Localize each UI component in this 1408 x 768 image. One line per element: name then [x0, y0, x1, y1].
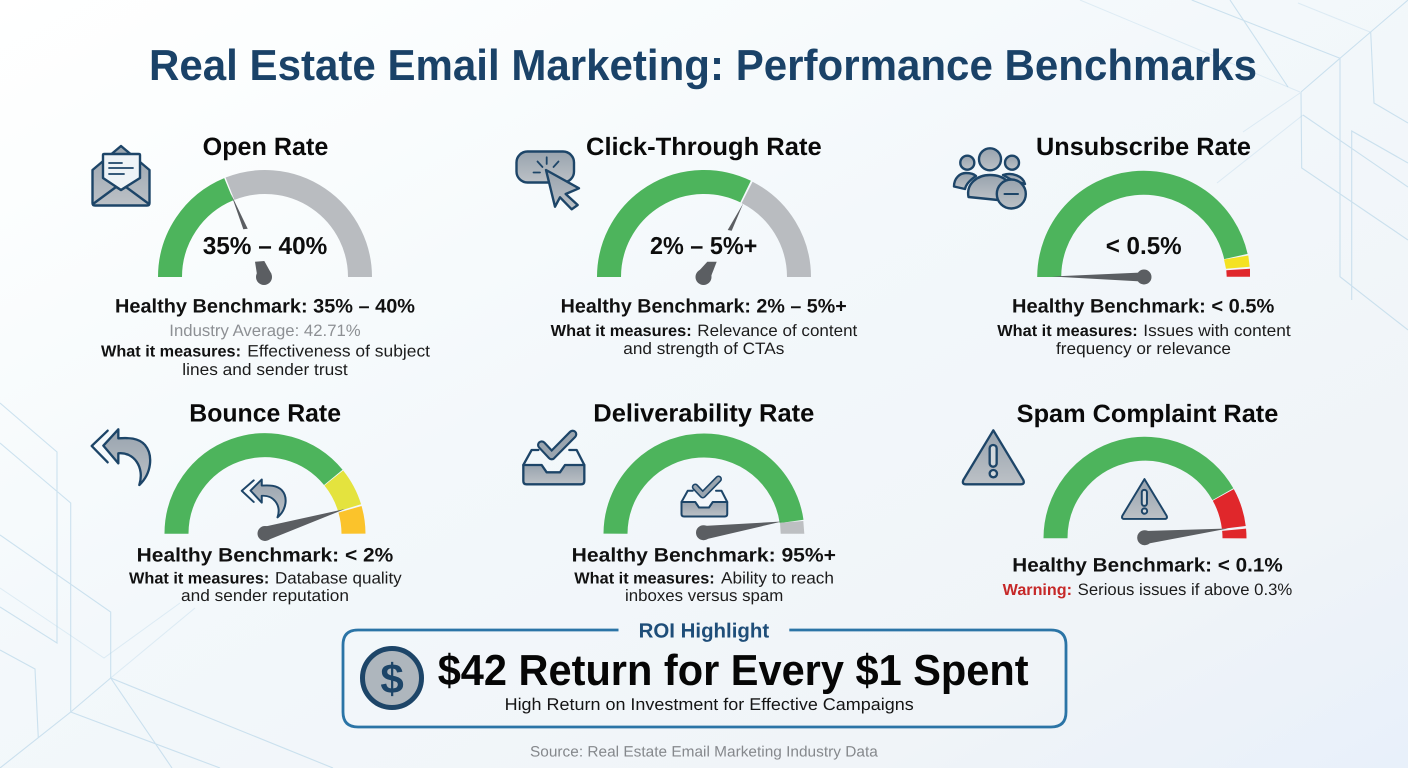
benchmark: deliverability rate: Healthy Benchmark: 95%+: [572, 545, 836, 567]
ROI subtext: High Return on Investment for Effective Campaigns: [505, 695, 914, 714]
description: bounce rate: Database quality: [275, 569, 402, 587]
gauge: deliverability rate: [616, 445, 804, 540]
icon: dollar coin: [362, 648, 422, 708]
heading: bounce rate: Bounce Rate: [189, 400, 341, 428]
panel: deliverability rate: [523, 400, 836, 605]
description: unsubscribe rate: What it measures:: [997, 323, 1138, 340]
icon: dollar coin: $: [380, 655, 404, 702]
description: unsubscribe rate: frequency or relevance: [1056, 340, 1231, 358]
description: click-through rate: What it measures:: [551, 323, 692, 340]
warning note: Serious issues if above 0.3%: [1078, 581, 1293, 599]
icon: bounce arrow: [92, 429, 150, 485]
heading: open rate: Open Rate: [203, 133, 328, 161]
description: unsubscribe rate: Issues with content: [1143, 322, 1291, 340]
benchmark: click-through rate: Healthy Benchmark: 2% – 5%+: [561, 295, 847, 317]
gauge value: click-through rate: 2% – 5%+: [650, 233, 757, 260]
description: deliverability rate: inboxes versus spam: [625, 587, 783, 605]
heading: spam complaint rate: Spam Complaint Rate: [1017, 400, 1278, 428]
heading: deliverability rate: Deliverability Rate: [593, 400, 814, 428]
panel: ROI highlight: [343, 619, 1066, 727]
gauge: unsubscribe rate: [1049, 183, 1250, 284]
ROI box outline: [343, 630, 1066, 727]
source note: Source: Real Estate Email Marketing Industry Data: [530, 744, 878, 761]
description: click-through rate: [551, 322, 858, 358]
description: click-through rate: and strength of CTAs: [623, 340, 784, 358]
icon: small bounce arrow: [242, 479, 286, 517]
panel: bounce rate: [92, 400, 402, 605]
icon: open envelope: [92, 146, 150, 206]
gauge: open rate: [170, 182, 360, 285]
heading: unsubscribe rate: Unsubscribe Rate: [1036, 133, 1251, 161]
gauge: spam complaint rate: [1056, 449, 1235, 545]
warning note: Warning:: [1003, 582, 1072, 599]
icon: button and cursor: [516, 152, 579, 209]
description: bounce rate: What it measures:: [129, 570, 269, 587]
description: deliverability rate: What it measures:: [574, 570, 715, 587]
description: bounce rate: and sender reputation: [181, 587, 349, 605]
panel: click-through rate: [516, 133, 858, 358]
heading: click-through rate: Click-Through Rate: [586, 133, 822, 161]
description: open rate: lines and sender trust: [182, 361, 348, 379]
gauge value: unsubscribe rate: < 0.5%: [1106, 233, 1182, 260]
icon: users with minus: [954, 148, 1026, 208]
ROI headline: $42 Return for Every $1 Spent: [438, 647, 1029, 695]
description: open rate: Effectiveness of subject: [247, 343, 430, 361]
gauge: click-through rate: [609, 182, 799, 285]
panel: unsubscribe rate: [954, 133, 1291, 358]
description: click-through rate: Relevance of content: [697, 322, 858, 340]
description: deliverability rate: [574, 569, 834, 605]
description: open rate: [101, 343, 430, 379]
benchmark: spam complaint rate: Healthy Benchmark: < 0.1%: [1012, 555, 1283, 577]
ROI label: ROI Highlight: [639, 619, 769, 642]
description: bounce rate: [129, 569, 402, 605]
gauge value: open rate: 35% – 40%: [203, 233, 328, 260]
benchmark: open rate: Healthy Benchmark: 35% – 40%: [115, 295, 415, 317]
description: open rate: What it measures:: [101, 344, 241, 361]
benchmark: unsubscribe rate: Healthy Benchmark: < 0.5%: [1012, 295, 1274, 317]
description: deliverability rate: Ability to reach: [721, 569, 834, 587]
industry average: Industry Average: 42.71%: [169, 322, 361, 340]
icon: small warning triangle: [1122, 479, 1167, 519]
title: Real Estate Email Marketing: Performance Benchmarks: [149, 42, 1257, 90]
icon: inbox with check: [523, 434, 584, 484]
icon: small inbox with check: [682, 479, 727, 516]
gauge: bounce rate: [176, 445, 354, 541]
panel: spam complaint rate: [963, 400, 1293, 599]
icon: warning triangle: [963, 430, 1024, 484]
benchmark: bounce rate: Healthy Benchmark: < 2%: [137, 545, 393, 567]
description: unsubscribe rate: [997, 322, 1291, 358]
panel: open rate: [92, 133, 430, 379]
